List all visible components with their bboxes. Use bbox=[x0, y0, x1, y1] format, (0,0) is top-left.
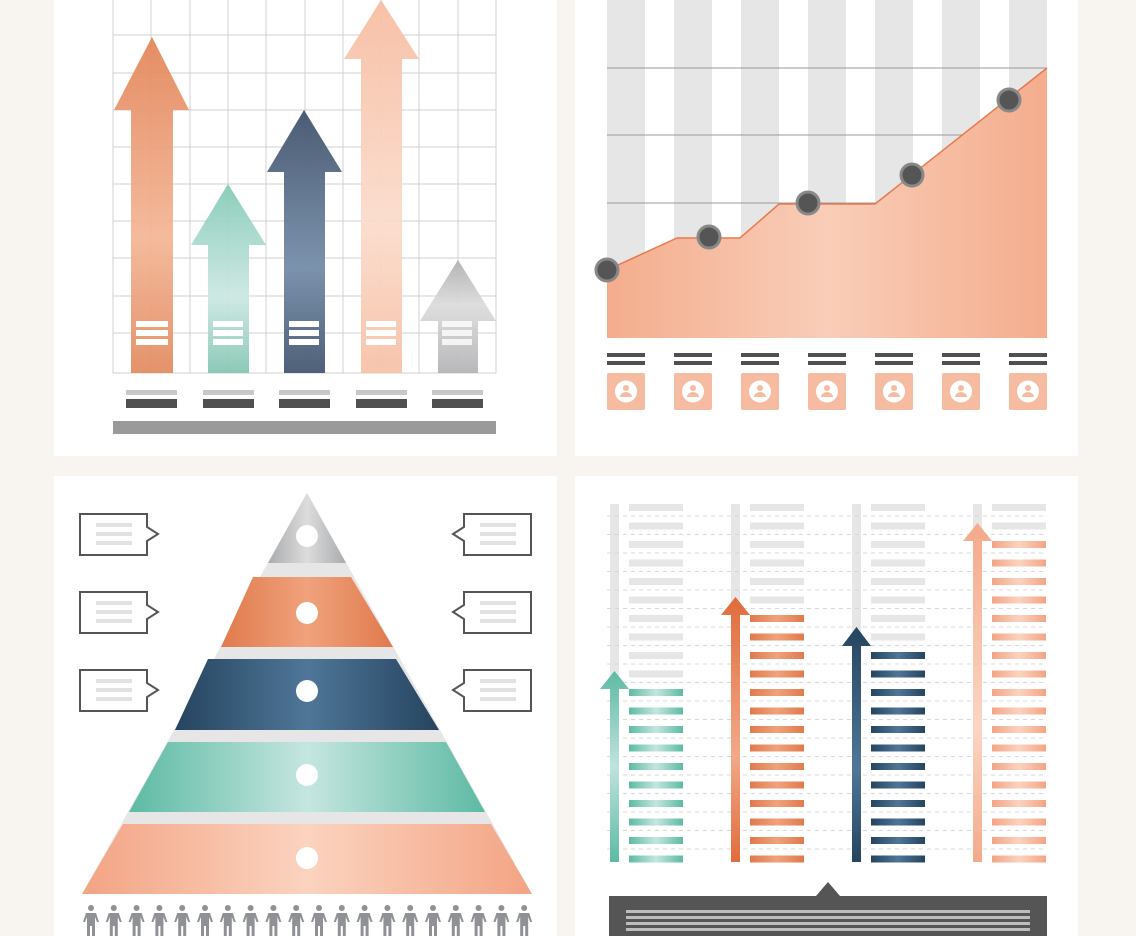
column peach bbox=[963, 523, 1046, 862]
pyramid level 2 orange bbox=[221, 577, 393, 647]
callouts right bbox=[453, 514, 531, 711]
panel: progress columns bbox=[575, 476, 1078, 936]
pyramid level 1 gray bbox=[268, 493, 346, 563]
arrow: gray bbox=[420, 260, 496, 373]
people row bbox=[83, 905, 532, 936]
footer bar bbox=[113, 421, 496, 434]
arrow: navy bbox=[267, 110, 342, 373]
person icons bbox=[607, 373, 1047, 410]
callouts left bbox=[80, 514, 158, 711]
arrow: teal bbox=[191, 184, 266, 373]
data points bbox=[596, 89, 1020, 281]
axis labels bbox=[126, 390, 483, 408]
column orange bbox=[721, 597, 804, 862]
pyramid level 5 peach bbox=[82, 824, 532, 894]
arrow: orange bbox=[114, 37, 189, 373]
column navy bbox=[842, 627, 925, 862]
panel: arrow bar chart bbox=[54, 0, 557, 456]
x labels bbox=[607, 353, 1047, 365]
arrow: peach bbox=[344, 0, 419, 373]
panel: pyramid bbox=[54, 476, 557, 936]
pyramid level 3 navy bbox=[175, 659, 439, 730]
panel: area chart bbox=[575, 0, 1078, 456]
pyramid level 4 teal bbox=[129, 742, 485, 812]
column teal bbox=[600, 671, 683, 862]
area bbox=[607, 68, 1047, 338]
caption box bbox=[609, 882, 1047, 936]
